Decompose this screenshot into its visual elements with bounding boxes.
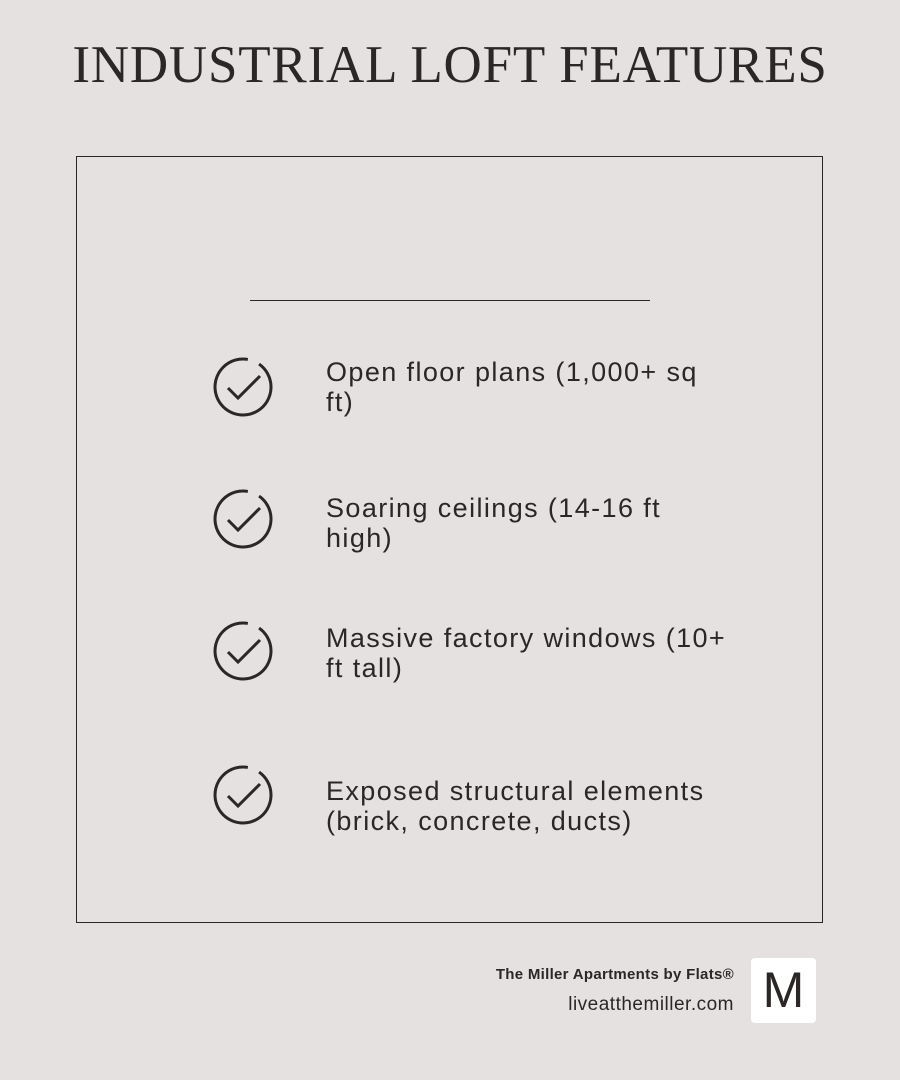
footer: brand text: The Miller Apartments by Flats® <box>496 966 734 983</box>
text: item 4: (brick, concrete, ducts) <box>326 806 633 836</box>
icon: check 4 <box>214 766 272 824</box>
text: item 3 <box>326 623 726 683</box>
icon: check 1 <box>214 358 272 416</box>
logo: M <box>751 958 816 1023</box>
text: item 1: ft) <box>326 387 354 417</box>
text: item 4 <box>326 776 704 836</box>
text: item 1: Open floor plans (1,000+ sq <box>326 357 698 387</box>
text: item 2 <box>326 493 661 553</box>
footer: brand text: liveatthemiller.com <box>568 994 734 1015</box>
text: item 3: ft tall) <box>326 653 403 683</box>
title: INDUSTRIAL LOFT FEATURES <box>72 36 828 94</box>
text: item 4: Exposed structural elements <box>326 776 704 806</box>
logo: M: M <box>763 962 804 1018</box>
icon: check 2 <box>214 490 272 548</box>
panel: features box <box>76 156 823 923</box>
footer: brand text <box>496 966 734 1015</box>
text: item 1 <box>326 357 698 417</box>
text: item 3: Massive factory windows (10+ <box>326 623 726 653</box>
text: item 2: Soaring ceilings (14-16 ft <box>326 493 661 523</box>
icon: check 3 <box>214 622 272 680</box>
text: item 2: high) <box>326 523 393 553</box>
